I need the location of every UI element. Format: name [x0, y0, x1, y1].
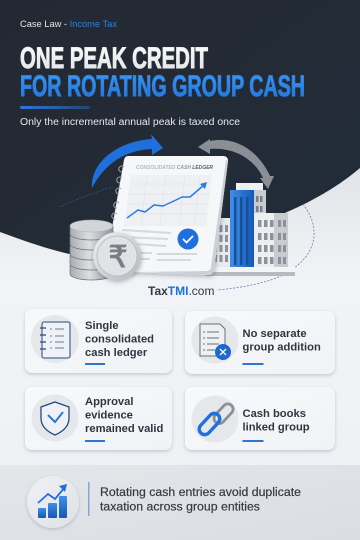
icon: growth chart — [27, 476, 79, 528]
breadcrumb label: Case Law - Income Tax — [20, 19, 117, 29]
icon: document with cross — [200, 324, 231, 360]
card text: linked group — [242, 422, 310, 434]
ledger title: CONSOLIDATED CASH LEDGER — [136, 165, 213, 171]
coin stack — [70, 220, 113, 280]
rupee coin — [93, 232, 141, 280]
card text: group addition — [242, 342, 321, 354]
ledger notebook — [112, 156, 228, 275]
card: no separate group addition — [185, 311, 335, 374]
icon: shield check — [41, 402, 69, 435]
card text: cash ledger — [85, 347, 148, 359]
line chart — [127, 185, 204, 218]
icon: chain link — [197, 402, 235, 437]
card text: Approval — [85, 396, 134, 408]
card: single consolidated cash ledger — [25, 309, 172, 373]
footer text: taxation across group entities — [100, 500, 260, 514]
title — [20, 42, 305, 103]
buildings — [206, 183, 295, 276]
icon: notebook — [40, 322, 70, 358]
hero illustration — [60, 134, 314, 290]
title rule — [20, 106, 90, 109]
footer band — [0, 465, 360, 540]
card text: remained valid — [85, 423, 164, 435]
brand: TaxTMI.com — [148, 284, 214, 298]
card text: Cash books — [242, 408, 306, 420]
card text: No separate — [242, 328, 307, 340]
icon: blue rotation arrow — [92, 134, 163, 188]
icon: grey rotation arrow — [198, 139, 274, 189]
card: cash books linked group — [185, 387, 335, 450]
card text: evidence — [85, 410, 133, 422]
dark header background — [0, 0, 360, 261]
title: ONE PEAK CREDIT — [20, 42, 208, 75]
rupee coin: ₹ — [108, 241, 128, 274]
card: approval evidence remained valid — [25, 387, 172, 450]
subtitle: Only the incremental annual peak is taxed once — [20, 117, 240, 128]
icon: check badge — [178, 228, 198, 250]
card text: Single — [85, 320, 119, 332]
card text: consolidated — [85, 334, 154, 346]
footer text: Rotating cash entries avoid duplicate — [100, 485, 301, 499]
